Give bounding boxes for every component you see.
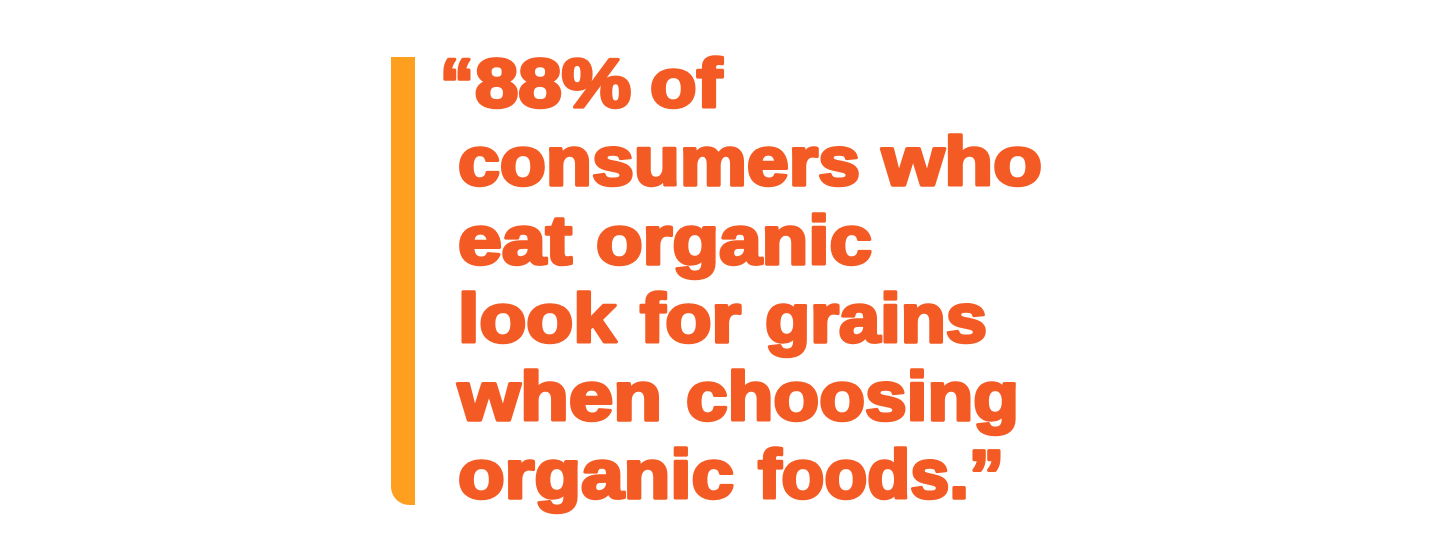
quote text: consumers bbox=[458, 123, 860, 200]
quote text: grains bbox=[765, 280, 987, 357]
quote text: 88% bbox=[475, 45, 631, 122]
quote text: for bbox=[640, 280, 741, 357]
quote text: organic bbox=[596, 202, 872, 279]
quote text: choosing bbox=[686, 358, 1019, 435]
quote text: who bbox=[881, 123, 1042, 200]
quote text bbox=[440, 45, 1042, 513]
quote text: when bbox=[457, 358, 662, 435]
quote text: eat bbox=[458, 202, 572, 279]
quote text: of bbox=[650, 45, 723, 122]
quote text: “ bbox=[440, 45, 474, 122]
accent bar bbox=[391, 57, 415, 505]
quote text: look bbox=[458, 280, 617, 357]
quote text: foods.” bbox=[758, 436, 1004, 513]
quote text: organic bbox=[458, 436, 734, 513]
